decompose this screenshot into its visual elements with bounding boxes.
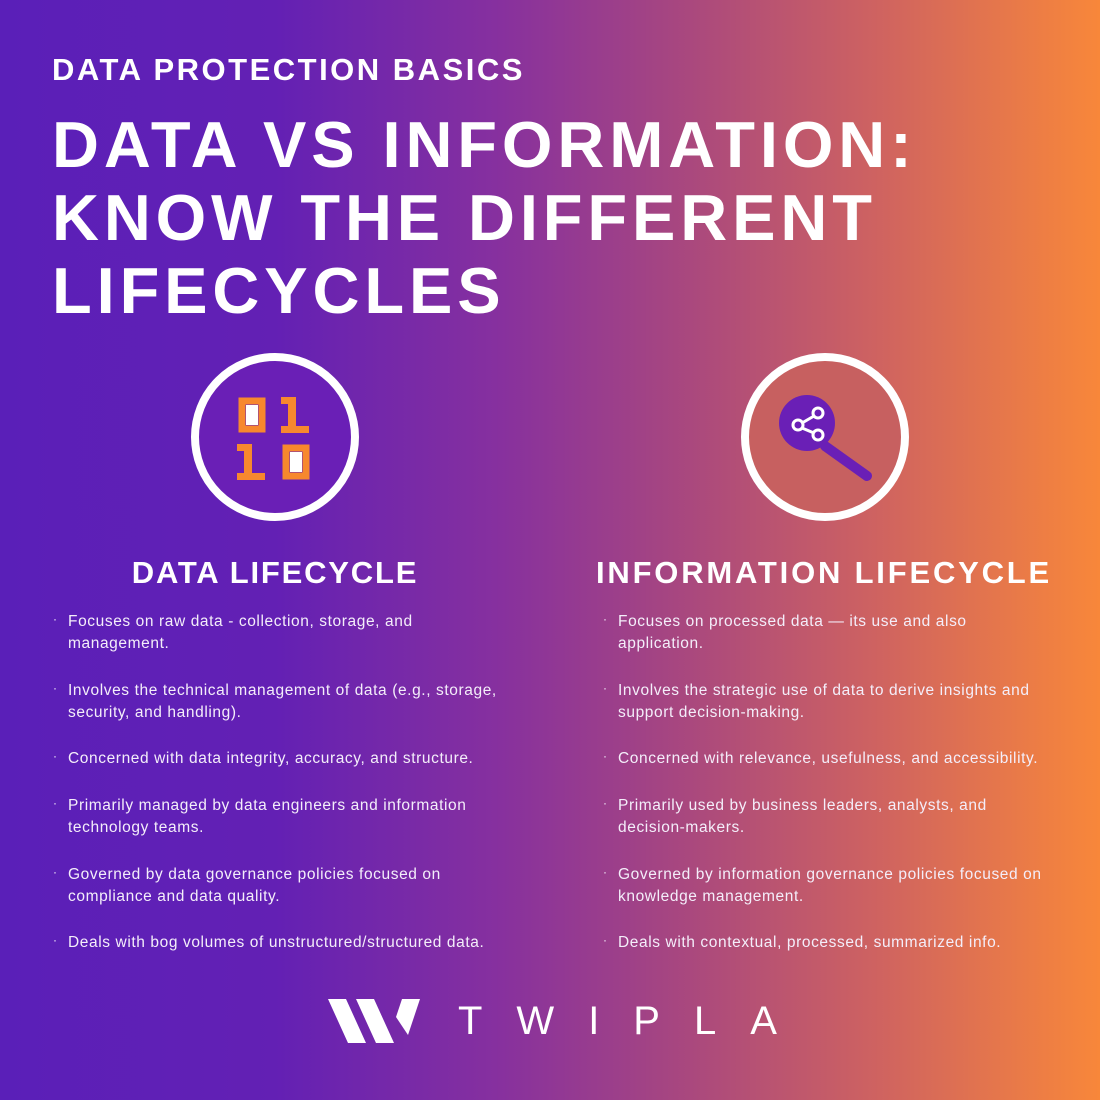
heading: information lifecycle: INFORMATION LIFECYCLE [596, 555, 1052, 590]
subtitle: DATA PROTECTION BASICS [52, 52, 525, 87]
logo: TWIPLA: TWIPLA [458, 999, 811, 1043]
icon: magnifier share [741, 353, 909, 521]
title [52, 108, 917, 327]
list: data lifecycle: Concerned with data integrity, accuracy, and structure. [68, 750, 473, 767]
list: information lifecycle: Focuses on processed data — its use and also application. [618, 613, 967, 652]
list: information lifecycle: Involves the strategic use of data to derive insights and support decision-making. [618, 682, 1030, 721]
heading: data lifecycle: DATA LIFECYCLE [132, 555, 418, 590]
list: information lifecycle: Governed by information governance policies focused on knowledge management. [618, 866, 1042, 905]
list: data lifecycle [54, 613, 497, 951]
list: data lifecycle: Deals with bog volumes of unstructured/structured data. [68, 934, 484, 951]
list: information lifecycle: Deals with contextual, processed, summarized info. [618, 934, 1001, 951]
list: data lifecycle: Involves the technical management of data (e.g., storage, security, and handling). [68, 682, 497, 721]
list: information lifecycle: Primarily used by business leaders, analysts, and decision‑makers. [618, 797, 987, 836]
title: DATA VS INFORMATION: [52, 108, 917, 181]
list: information lifecycle [604, 613, 1042, 951]
title: LIFECYCLES [52, 254, 505, 327]
icon: binary data [191, 353, 359, 521]
list: data lifecycle: Focuses on raw data - collection, storage, and management. [68, 613, 413, 652]
list: data lifecycle: Primarily managed by data engineers and information technology teams. [68, 797, 466, 836]
list: data lifecycle: Governed by data governance policies focused on compliance and data quality. [68, 866, 441, 905]
list: information lifecycle: Concerned with relevance, usefulness, and accessibility. [618, 750, 1038, 767]
title: KNOW THE DIFFERENT [52, 181, 877, 254]
